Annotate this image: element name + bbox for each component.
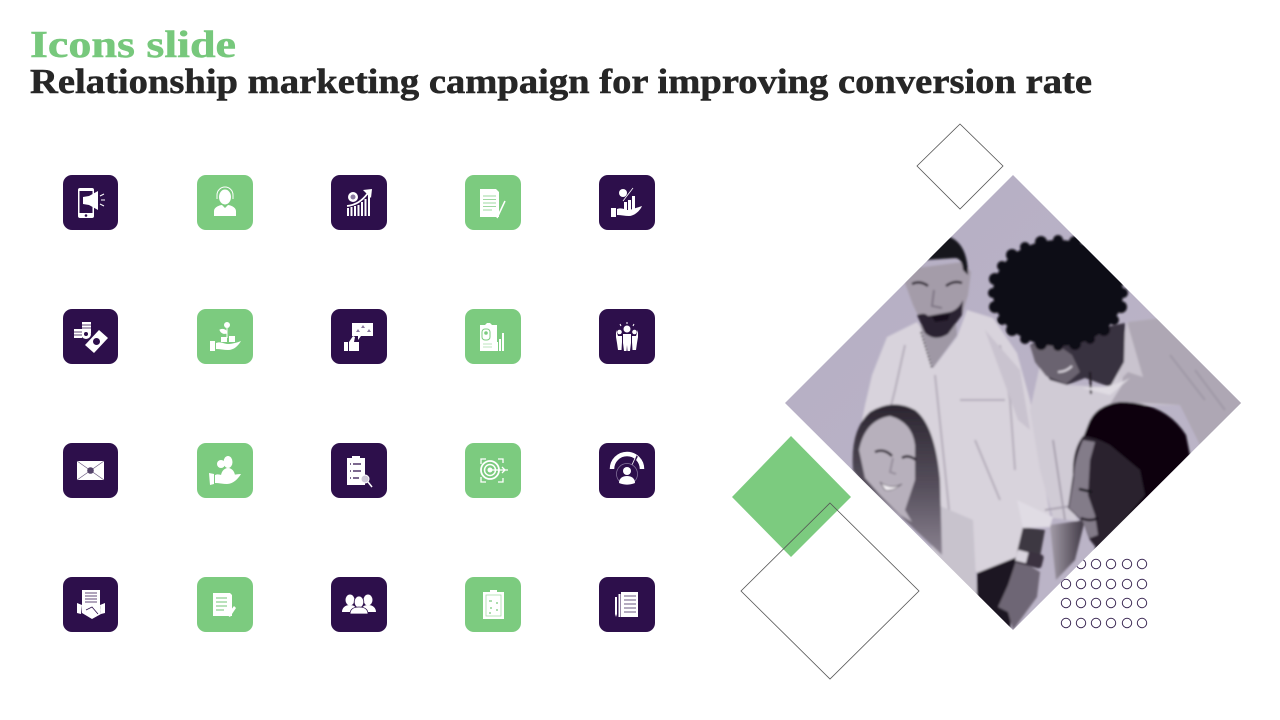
rolled cuff (1020, 504, 1054, 530)
icon tile: growth chart (331, 175, 387, 230)
icon tile: hand with rising bars (599, 175, 655, 230)
afro man's face (1030, 323, 1125, 387)
icon tile: hand with sprouting plant (197, 309, 253, 364)
icon tile: envelope (63, 443, 118, 498)
diamond photo: team of four (780, 170, 1245, 635)
lower arm and trousers (1050, 520, 1085, 580)
icon tile: clipboard profile with chart (465, 309, 521, 364)
man's neck and necklace (920, 323, 958, 368)
icon tile: thumbs up with star rating (331, 309, 387, 364)
icon tile: form with pencil (197, 577, 253, 632)
icon tile: coins and banknotes (63, 309, 118, 364)
icon tile: stacked documents and pen (599, 577, 655, 632)
icon tile: clipboard plan (465, 577, 521, 632)
afro man's shirt (1031, 368, 1161, 522)
afro hair (988, 235, 1128, 351)
icon tile: group celebrating (599, 309, 655, 364)
icon tile: team of three (331, 577, 387, 632)
outline diamond: large (741, 503, 919, 679)
icon tile: checklist with magnifier (331, 443, 387, 498)
woman's hair (853, 404, 942, 555)
heading: subtitle: Relationship marketing campaign for improving conversion rate (30, 63, 1092, 101)
dot pattern (1061, 559, 1147, 628)
man with short hair (1083, 402, 1190, 552)
title (30, 24, 1092, 101)
woman's shirt (930, 505, 977, 600)
icon tile: target with arrow (465, 443, 521, 498)
icon tile: handshake and contract (63, 577, 118, 632)
icon tile: document and pen (465, 175, 521, 230)
icon tile: phone with megaphone (63, 175, 118, 230)
icon tile: gauge with person (599, 443, 655, 498)
outline diamond: small (917, 124, 1003, 209)
green diamond (732, 436, 851, 557)
icon tile: hand holding person with gear (197, 443, 253, 498)
icon grid (63, 175, 655, 632)
icon tile: support agent (197, 175, 253, 230)
man's face and beard (904, 260, 972, 318)
man in white shirt (858, 310, 1050, 573)
heading: Icons slide: Icons slide (30, 24, 236, 66)
forearm and watch (1017, 527, 1045, 557)
woman's face (859, 416, 915, 522)
